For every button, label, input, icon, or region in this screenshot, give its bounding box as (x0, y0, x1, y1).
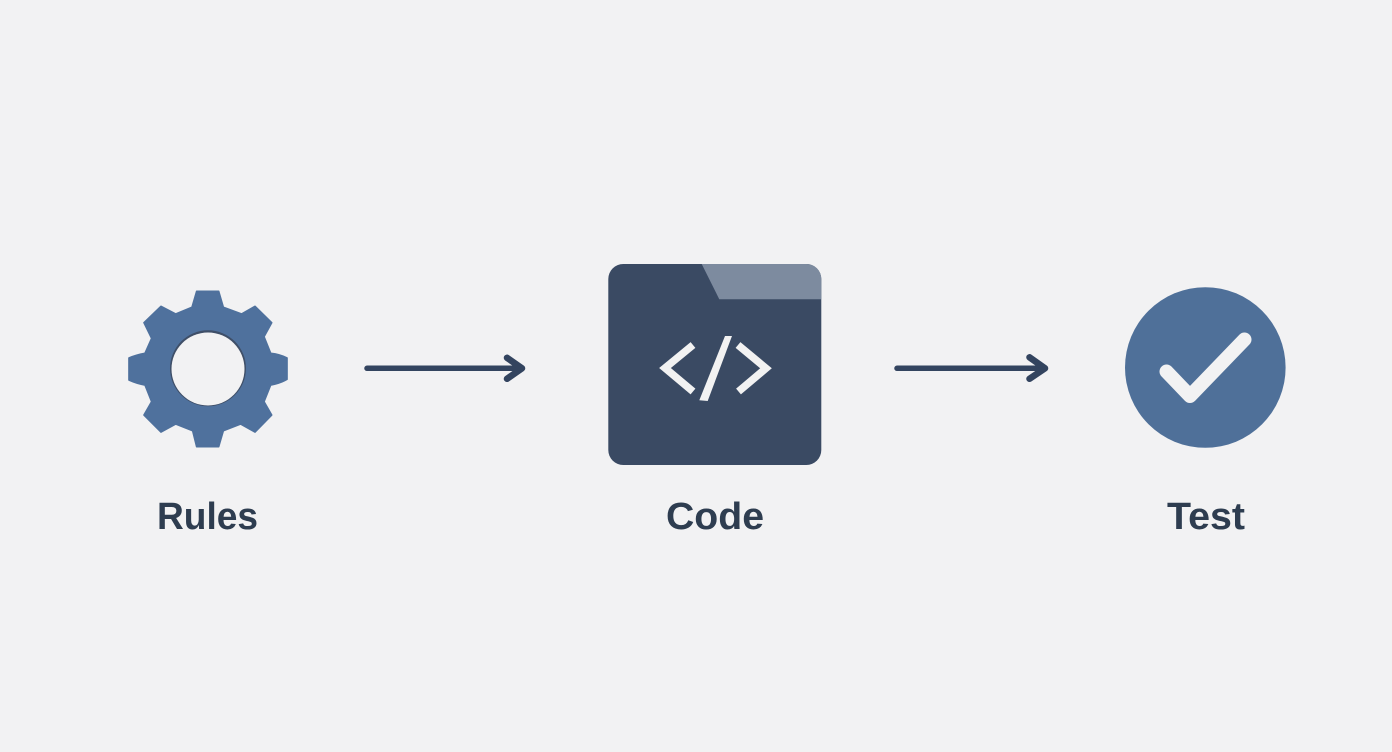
window tab (702, 264, 821, 299)
icon: code window (608, 264, 821, 465)
label: Code: Code (666, 496, 764, 538)
label: Rules: Rules (157, 496, 258, 538)
label: Test: Test (1167, 496, 1245, 538)
icon: check circle (1125, 287, 1286, 448)
arrow: code to test (897, 357, 1045, 379)
arrow: rules to code (367, 358, 522, 379)
icon: gear (129, 291, 287, 447)
code symbol (665, 336, 766, 401)
